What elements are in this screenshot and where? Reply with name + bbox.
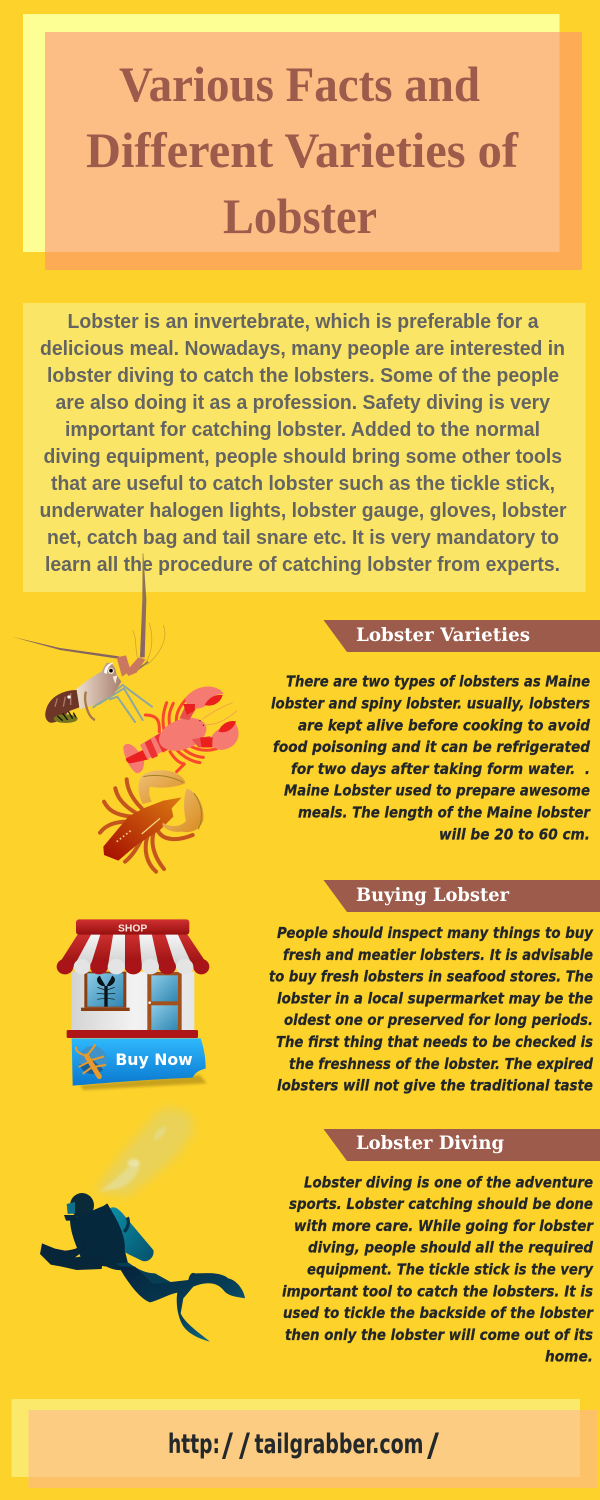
icon: orange crayfish xyxy=(100,770,204,872)
heading: Lobster Varieties xyxy=(324,620,600,652)
window xyxy=(81,972,130,1011)
panel: introduction: diving equipment, people should bring some other tools xyxy=(44,445,562,468)
door xyxy=(147,972,182,1031)
panel: introduction: learn all the procedure of catching lobster from experts. xyxy=(45,553,560,576)
shop sign text: SHOP xyxy=(118,924,147,935)
awning xyxy=(57,919,209,974)
text block: Lobster Varieties xyxy=(271,673,591,843)
heading: Buying Lobster xyxy=(324,880,600,912)
counter xyxy=(67,1030,198,1038)
icon: red lobster xyxy=(123,686,239,773)
footer url: / xyxy=(239,1426,250,1464)
footer url: / xyxy=(222,1426,233,1464)
diver body xyxy=(40,1193,245,1342)
panel: introduction: underwater halogen lights, lobster gauge, gloves, lobster xyxy=(40,499,567,522)
title: Different Varieties of xyxy=(86,122,519,178)
tank xyxy=(110,1207,154,1261)
text block: Buying Lobster xyxy=(269,924,594,1095)
heading: Lobster Diving xyxy=(324,1129,600,1161)
icon: gold lobster xyxy=(76,1045,105,1077)
panel: introduction: lobster diving to catch the lobsters. Some of the people xyxy=(47,364,559,387)
footer url: http: xyxy=(168,1429,220,1460)
heading: Buying Lobster: Buying Lobster xyxy=(356,885,509,906)
panel: introduction: delicious meal. Nowadays, many people are interested in xyxy=(40,337,565,360)
panel: introduction: that are useful to catch lobster such as the tickle stick, xyxy=(51,472,555,495)
heading: Lobster Diving: Lobster Diving xyxy=(356,1133,504,1154)
text block: Lobster Diving: home. xyxy=(545,1348,593,1366)
heading: Lobster Varieties: Lobster Varieties xyxy=(356,625,530,646)
footer url: tailgrabber.com xyxy=(254,1429,424,1460)
icon: scuba diver xyxy=(40,1108,245,1342)
title xyxy=(86,56,519,244)
text block: Lobster Diving xyxy=(282,1173,594,1366)
buy now badge xyxy=(72,1038,206,1086)
badge shadow xyxy=(80,1075,207,1090)
panel: introduction: important for catching lobster. Added to the normal xyxy=(65,418,540,441)
icon: spiny lobster xyxy=(12,553,165,723)
panel: introduction: are also doing it as a profession. Safety diving is very xyxy=(56,391,551,414)
footer url xyxy=(168,1426,439,1464)
title: Lobster xyxy=(223,188,377,244)
bubbles xyxy=(95,1108,194,1197)
title panel xyxy=(23,14,582,270)
panel: introduction: Lobster is an invertebrate, which is preferable for a xyxy=(68,310,539,333)
panel: introduction: net, catch bag and tail snare etc. It is very mandatory to xyxy=(47,526,559,549)
shop wall xyxy=(72,972,194,1032)
footer url: / xyxy=(427,1426,439,1464)
footer panel xyxy=(12,1399,597,1488)
title: Various Facts and xyxy=(119,56,480,112)
panel: introduction xyxy=(23,303,586,592)
icon: shop with buy now badge xyxy=(57,919,209,1090)
buy now badge: Buy Now xyxy=(115,1050,193,1069)
